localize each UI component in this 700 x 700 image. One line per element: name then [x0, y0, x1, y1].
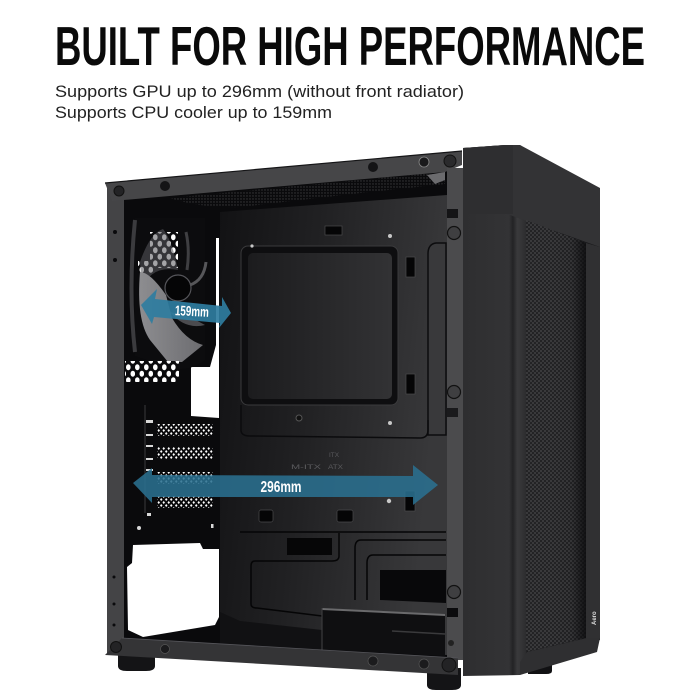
tray right recess: [428, 243, 446, 435]
arrow: 296mm gpu clearance: [133, 465, 438, 505]
front panel face: [463, 145, 527, 676]
tray labels: ITX: [329, 453, 339, 459]
side mesh grille: [526, 220, 586, 652]
bottom rail: [105, 638, 458, 675]
white slit and opening behind fan: [191, 238, 219, 418]
side bottom band: [520, 638, 600, 675]
side right strip: [586, 243, 600, 642]
tray standoffs: [250, 234, 392, 503]
tray lower panel line: [241, 405, 428, 438]
side panel backing: [505, 205, 600, 672]
psu opening: [127, 543, 219, 637]
right frame column: [447, 168, 463, 660]
front panel upper face: [463, 145, 513, 214]
psu shroud: [240, 532, 446, 616]
subtitle: specifications: Supports GPU up to 296mm (without front radiator): [55, 82, 464, 101]
tray tie-down slots: [259, 226, 415, 555]
pci slot vents: [157, 424, 213, 508]
pc case: [105, 145, 600, 690]
hdd cage recess: [380, 570, 446, 603]
interior rear wall: [112, 165, 447, 658]
side panel top band: [463, 145, 600, 247]
arrow: 296mm gpu clearance: 296mm: [260, 479, 302, 496]
drive cage: [322, 608, 445, 656]
rear fan: [132, 218, 206, 369]
shroud base shadow: [220, 612, 322, 650]
top mesh vent: [170, 172, 445, 207]
subtitle: specifications: Supports CPU cooler up to 159mm: [55, 103, 332, 122]
subtitle: specifications: [55, 82, 464, 122]
expansion slot brackets: [137, 405, 214, 530]
brand logo: Aero: [592, 611, 598, 625]
tray cpu cutout: [241, 246, 398, 405]
tray labels: ATX: [328, 465, 343, 471]
case feet: [118, 650, 552, 690]
tray labels: [291, 453, 343, 471]
rear vent holes: [125, 361, 179, 382]
motherboard tray: [220, 195, 447, 655]
tray labels: M-ITX: [291, 465, 321, 471]
top rail: [105, 151, 462, 201]
arrow: 159mm cpu cooler clearance: 159mm: [175, 302, 209, 320]
side mesh shadow: [550, 230, 586, 646]
arrow: 159mm cpu cooler clearance: [141, 289, 231, 328]
left frame column: [107, 186, 124, 655]
